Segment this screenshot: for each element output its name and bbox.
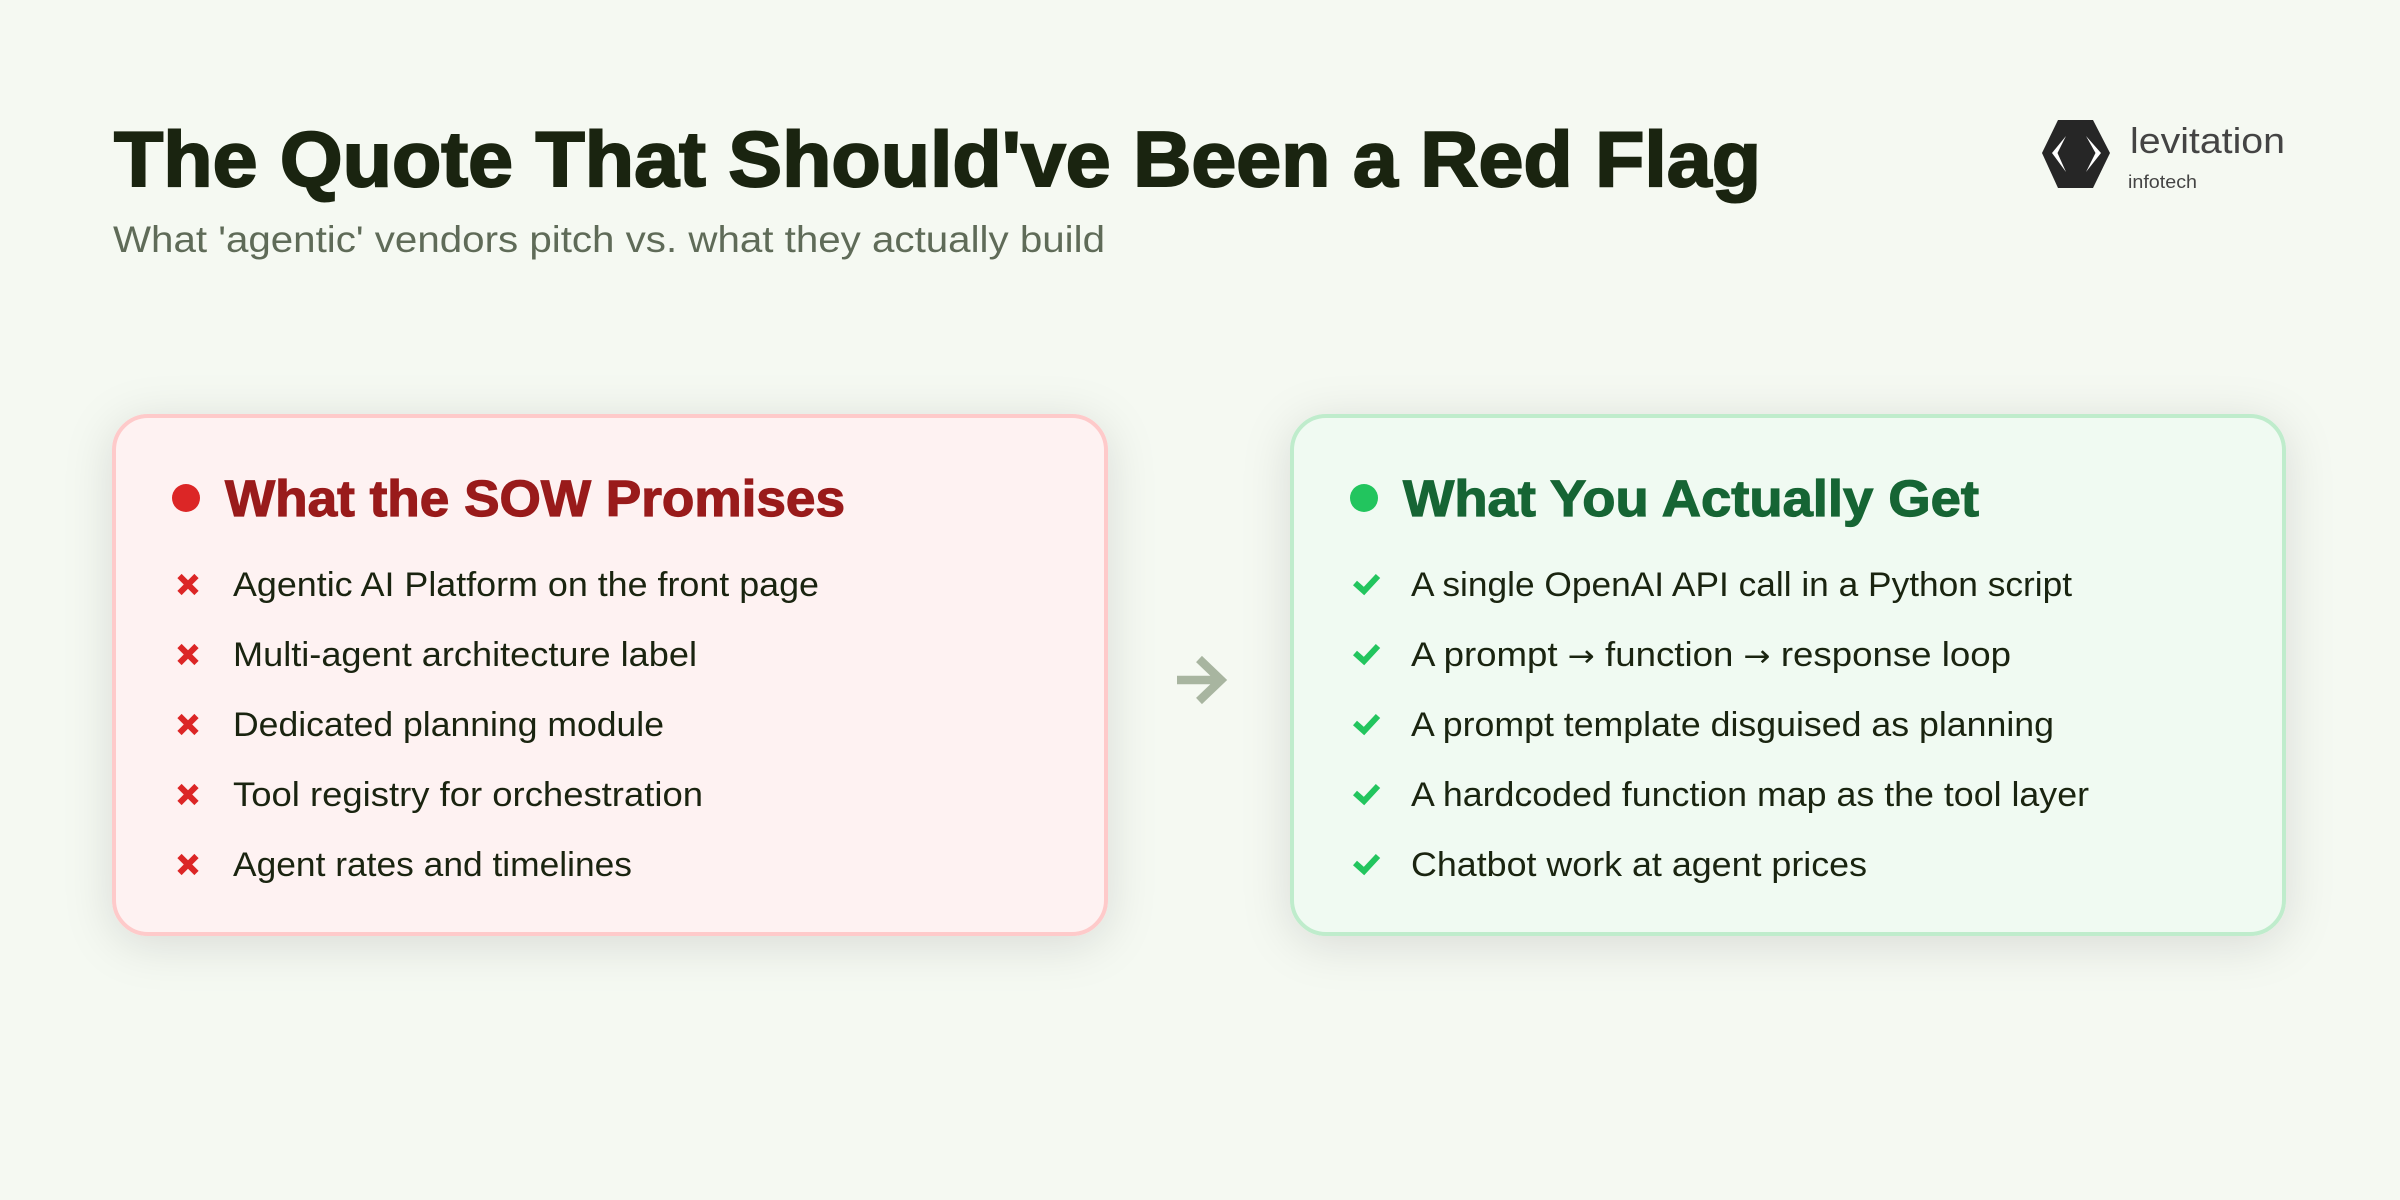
item 3: Dedicated planning module [233,706,664,744]
panel heading: What You Actually Get [1403,470,1979,527]
item 4: Tool registry for orchestration [233,776,703,814]
logo tagline: infotech [2128,172,2197,192]
icon: hexagon logo mark [2042,120,2110,188]
logo: levitation infotech [2042,120,2285,192]
title: The Quote That Should've Been a Red Flag [114,115,1761,203]
panel heading: What the SOW Promises [225,470,845,527]
item 1: A single OpenAI API call in a Python script [1411,566,2073,604]
logo wordmark: levitation [2130,120,2285,161]
panel: what the SOW promises [114,416,1106,934]
item 1: Agentic AI Platform on the front page [233,566,819,604]
status dot green [1350,484,1378,512]
item 3: A prompt template disguised as planning [1411,706,2054,744]
status dot red [172,484,200,512]
subtitle: What 'agentic' vendors pitch vs. what they actually build [113,219,1105,260]
item 5: Chatbot work at agent prices [1411,846,1867,884]
panel background [114,416,1106,934]
item 5: Agent rates and timelines [233,846,632,884]
panel: what you actually get [1292,416,2284,934]
arrow [1177,659,1221,701]
panel background [1292,416,2284,934]
item 2: Multi-agent architecture label [233,636,697,674]
item 2: A prompt → function → response loop [1411,636,2011,674]
item 4: A hardcoded function map as the tool layer [1411,776,2089,814]
